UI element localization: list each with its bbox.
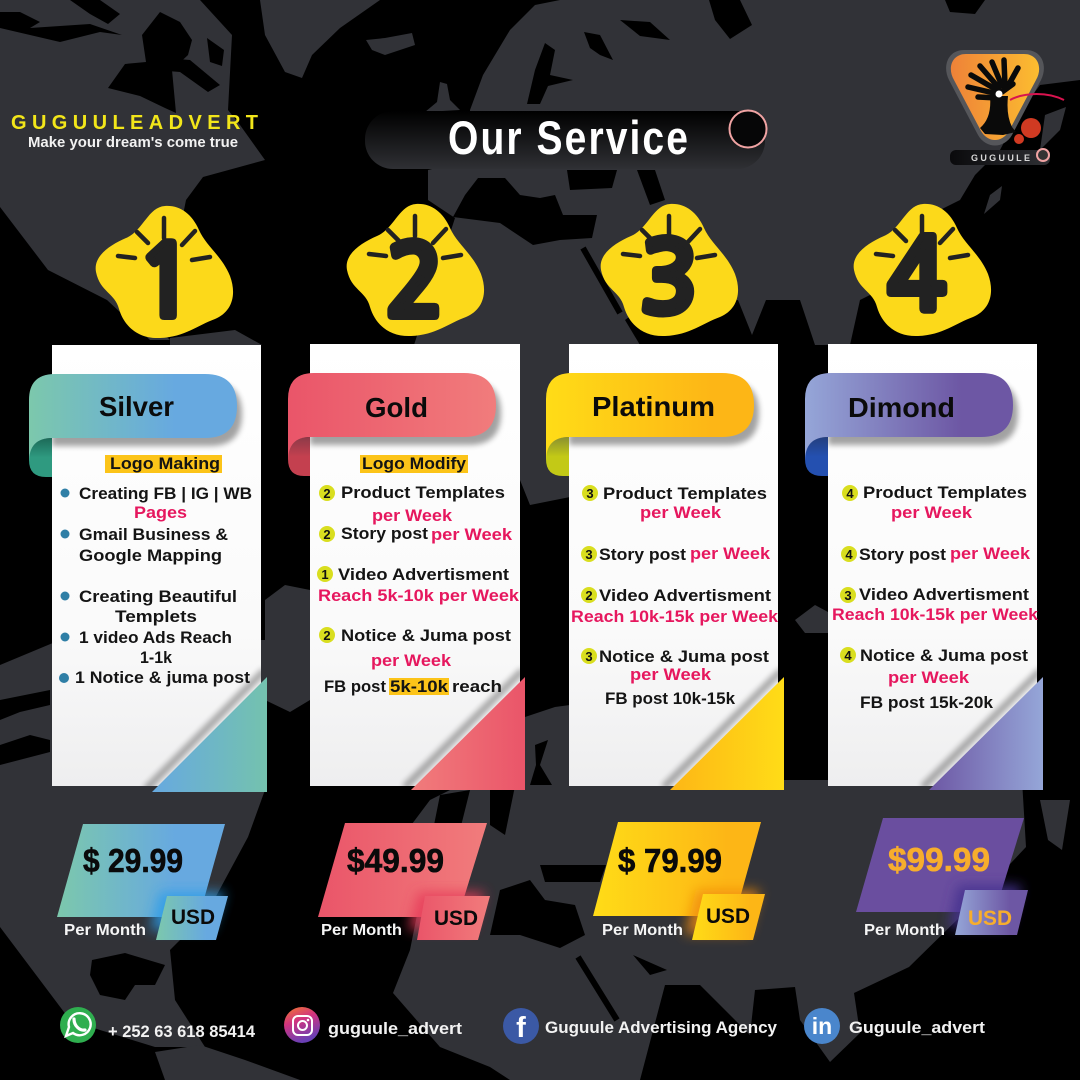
badge 1: 1 [136, 234, 196, 331]
feature list: Silver: Creating Beautiful [79, 587, 237, 606]
feature list: Platinum [571, 484, 779, 708]
price tag: $79.99: Per Month [602, 922, 683, 939]
feature list: Gold: per Week [431, 525, 513, 544]
badge 2 [347, 204, 484, 336]
feature list: Silver [59, 454, 252, 687]
feature list: Dimond: Notice & Juma post [860, 646, 1028, 665]
feature list: Gold: Logo Modify [362, 454, 467, 473]
ribbon: Dimond [805, 373, 1013, 476]
feature list: Gold: reach [452, 677, 502, 696]
feature list: Gold: per Week [372, 506, 453, 525]
contact: Instagram [284, 1007, 462, 1043]
ribbon: Platinum [546, 373, 754, 476]
ribbon: Silver: Silver [99, 391, 174, 422]
feature list: Silver: Google Mapping [79, 546, 222, 565]
feature list: Platinum: Product Templates [603, 484, 767, 503]
feature list: Gold: Story post [341, 524, 428, 543]
contact: WhatsApp [60, 1007, 256, 1043]
corner fold [670, 677, 784, 790]
badge 4: 4 [887, 228, 947, 325]
price tag: $49.99: Per Month [321, 922, 402, 939]
feature list: Dimond: Product Templates [863, 483, 1027, 502]
contact: LinkedIn: in [812, 1013, 832, 1039]
title banner [365, 110, 766, 169]
feature list: Dimond: Video Advertisment [859, 585, 1029, 604]
panel: Dimond plan [805, 344, 1043, 790]
price tag: $49.99: USD [434, 907, 478, 930]
price tag: $99.99: Per Month [864, 922, 945, 939]
title banner: Our Service [448, 111, 690, 164]
badge 3: 3 [639, 231, 699, 328]
price tag: $99.99: $99.99 [888, 841, 990, 878]
contact: WhatsApp: + 252 63 618 85414 [108, 1022, 256, 1041]
feature list: Gold: 1 [321, 567, 329, 582]
feature list: Dimond: 4 [844, 648, 852, 663]
price tag: $29.99: Per Month [64, 922, 146, 939]
feature list: Silver: 1 video Ads Reach [79, 628, 232, 647]
brand heading: Make your dream's come true [28, 134, 238, 151]
feature list: Dimond [832, 483, 1039, 712]
feature list: Platinum: per Week [640, 503, 722, 522]
panel: Silver plan [29, 345, 267, 792]
corner fold [411, 677, 525, 790]
feature list: Silver: 1 Notice & juma post [75, 668, 250, 687]
contact: Instagram: guguule_advert [328, 1019, 462, 1038]
feature list: Platinum: Video Advertisment [599, 586, 771, 605]
ribbon: Platinum: Platinum [592, 391, 715, 422]
feature list: Platinum: 3 [585, 649, 593, 664]
feature list: Silver: Gmail Business & [79, 525, 228, 544]
feature list: Gold: FB post [324, 677, 386, 696]
feature list: Silver: 1-1k [140, 648, 173, 667]
price tag: $49.99 [318, 823, 490, 940]
feature list: Platinum: FB post 10k-15k [605, 689, 736, 708]
feature list: Silver: Pages [134, 503, 187, 522]
price tag: $99.99: USD [968, 907, 1012, 930]
feature list: Dimond: 4 [846, 486, 854, 501]
logo: Guguule [946, 50, 1064, 165]
feature list: Gold: Notice & Juma post [341, 626, 511, 645]
feature list: Gold: Video Advertisment [338, 565, 509, 584]
feature list: Dimond: FB post 15k-20k [860, 693, 994, 712]
contact: Facebook: f [516, 1012, 526, 1044]
feature list: Dimond: per Week [891, 503, 973, 522]
feature list: Dimond: 3 [844, 588, 852, 603]
badge 3 [601, 204, 738, 336]
price tag: $49.99: $49.99 [347, 842, 444, 879]
feature list: Gold [317, 454, 520, 696]
badge 4 [854, 204, 991, 336]
feature list: Platinum: per Week [630, 665, 712, 684]
contact: Facebook: Guguule Advertising Agency [545, 1018, 778, 1037]
panel: Gold plan [288, 344, 525, 790]
price tag: $99.99 [856, 818, 1028, 939]
ribbon: Silver [29, 374, 237, 477]
ribbon: Dimond: Dimond [848, 392, 955, 423]
feature list: Dimond: Story post [859, 545, 946, 564]
price tag: $79.99: USD [706, 905, 750, 928]
feature list: Gold: Reach 5k-10k per Week [318, 586, 520, 605]
feature list: Platinum: Reach 10k-15k per Week [571, 607, 779, 626]
price tag: $29.99 [57, 824, 228, 940]
logo: Guguule: GUGUULE [971, 153, 1030, 163]
feature list: Dimond: per Week [888, 668, 970, 687]
contact: LinkedIn: Guguule_advert [849, 1018, 985, 1037]
badge 1 [96, 206, 233, 338]
feature list: Silver: Templets [115, 607, 197, 626]
ribbon: Gold [288, 373, 496, 476]
price tag: $79.99 [593, 822, 765, 940]
feature list: Gold: 2 [323, 628, 331, 643]
brand heading [11, 112, 258, 151]
feature list: Platinum: 2 [585, 588, 593, 603]
feature list: Gold: per Week [371, 651, 452, 670]
corner fold [152, 677, 267, 792]
feature list: Silver: Creating FB | IG | WB [79, 484, 252, 503]
feature list: Gold: Product Templates [341, 483, 505, 502]
feature list: Gold: 5k-10k [390, 677, 449, 696]
ribbon: Gold: Gold [365, 392, 428, 423]
feature list: Silver: Logo Making [110, 454, 220, 473]
feature list: Platinum: 3 [585, 547, 593, 562]
feature list: Platinum: per Week [690, 544, 771, 563]
feature list: Gold: 2 [323, 486, 331, 501]
price tag: $29.99: USD [171, 906, 215, 929]
price tag: $29.99: $ 29.99 [83, 842, 183, 879]
feature list: Dimond: 4 [845, 547, 853, 562]
brand heading: GUGUULEADVERT [11, 112, 258, 134]
feature list: Platinum: 3 [586, 486, 594, 501]
corner fold [929, 677, 1043, 790]
feature list: Platinum: Story post [599, 545, 686, 564]
contact: LinkedIn [804, 1008, 985, 1044]
contact: Facebook [503, 1008, 778, 1044]
feature list: Platinum: Notice & Juma post [599, 647, 769, 666]
feature list: Gold: 2 [323, 527, 331, 542]
feature list: Dimond: Reach 10k-15k per Week [832, 605, 1039, 624]
panel: Platinum plan [546, 344, 784, 790]
price tag: $79.99: $ 79.99 [618, 842, 722, 879]
feature list: Dimond: per Week [950, 544, 1031, 563]
badge 2: 2 [385, 234, 445, 331]
